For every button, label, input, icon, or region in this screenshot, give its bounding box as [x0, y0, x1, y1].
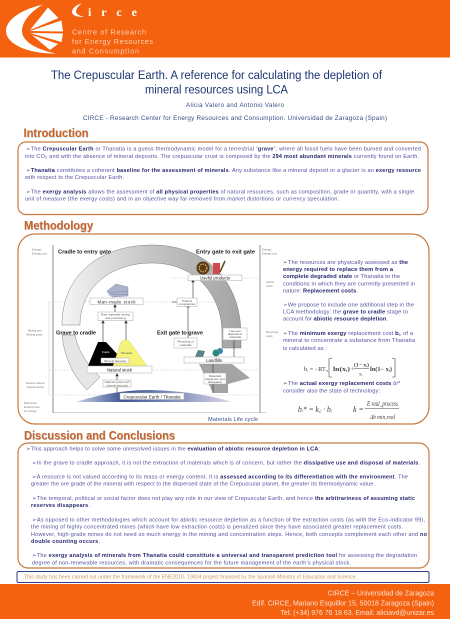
contact details: Tel: (+34) 976 76 18 63. Email: aliciavd@unizar.es — [280, 610, 435, 617]
text: grave to cradle paragraph: LCA methodology: the grave to cradle stage to — [283, 310, 408, 316]
box: raw materials formation: Natural cycles and — [105, 380, 130, 384]
box: man-made stock — [90, 298, 143, 304]
axis labels: Energy cost — [32, 252, 47, 256]
panel: introduction — [18, 142, 428, 214]
text: grave to cradle paragraph: account for abiotic resource depletion. — [283, 317, 388, 323]
funding note: This study has been carried out under the framework of the ENE2010- 19834 project financed by the Spanish Ministry of Education and Science. — [24, 575, 357, 581]
text: differentiation: ➢A resource is not valued according to its mass or energy content. It is assessed according to its differentiation with the environment. The — [32, 474, 408, 480]
affiliation: CIRCE - Research Center for Energy Resources and Consumption. Universidad de Zaragoza (Spain) — [83, 115, 387, 122]
equation: actual cost — [298, 400, 399, 421]
text: minimum exergy paragraph: mineral to concentrate a substance from Thanatia — [283, 338, 416, 344]
text: exergy analysis paragraph: ➢The exergy analysis allows the assessment of all physical properties of natural resources, such as composition, grade or quantity, with a single — [26, 190, 414, 196]
icon: CIRCE logo — [6, 4, 63, 54]
arrows: flows to man-made stock — [102, 280, 234, 393]
contact details — [252, 590, 435, 617]
text: arbitrariness — [31, 496, 415, 509]
box: product manufacture: manufacture — [179, 302, 196, 306]
text: differentiation: greater the ore grade of the mineral with respect to the dispersed state of the Crepuscular planet, the greater its thermodynamic value. — [31, 482, 375, 488]
box: disposal: disposal of — [228, 332, 242, 336]
logo wordmark: irce — [88, 5, 138, 19]
text: minimum exergy paragraph: is calculated as : — [283, 346, 327, 352]
box: recycling: Recycling of — [177, 340, 194, 344]
axis labels: Recycling — [266, 330, 279, 334]
text: other methodologies: the mining of highly concentrated mines (which have low extraction costs) is penalized since they have associated greater replacement costs. — [31, 525, 403, 531]
text: replacement costs paragraph: complete degraded state or Thanatia to the — [283, 274, 400, 280]
axis labels: Energy/ — [262, 248, 272, 252]
logo wordmark — [72, 4, 153, 56]
heading: Discussion and Conclusions: Discussion and Conclusions — [24, 431, 176, 443]
triangle: minerals — [113, 340, 147, 366]
text: dissipative use: ➢In the grave to cradle approach, it is not the extraction of materials which is of concern, but rather the dissipative use and disposal of materials. — [32, 460, 420, 466]
stage labels: Exit gate to grave — [157, 330, 203, 336]
crepuscular earth surface — [76, 390, 231, 402]
axis labels: costs — [266, 284, 273, 288]
box: raw materials: Raw materials mining — [101, 312, 130, 316]
axis labels: costs — [266, 334, 273, 338]
box: materials dispersion: Materials — [209, 374, 222, 378]
heading: Methodology: Methodology — [24, 221, 94, 233]
heading: Introduction: Introduction — [24, 128, 88, 140]
text: prediction tool: ➢The exergy analysis of minerals from Thanatia could constitute a universal and transparent prediction tool for assessing the degradation — [32, 553, 417, 559]
text: prediction tool: degree of non-renewable resources, with dramatic consequences for the future management of the earth’s physical stock. — [32, 560, 351, 566]
arc: cradle to exit gate band — [62, 245, 241, 348]
text: grave to cradle paragraph: ➢We propose to include one additional step in the — [283, 303, 414, 309]
box: raw materials formation — [103, 380, 131, 387]
axis labels: refining costs — [26, 332, 43, 336]
box: landfills: Landfills — [206, 358, 222, 363]
guide lines — [49, 278, 262, 395]
axis labels: Energy cost — [262, 252, 277, 256]
box: crepuscular earth / thanatia — [120, 393, 184, 400]
axis labels: Useful — [266, 280, 274, 284]
triangle: minerals: Minerals — [121, 351, 133, 355]
box: raw materials: and processing — [105, 316, 126, 320]
triangle: fuels: Fuels — [102, 350, 110, 354]
heading: Methodology: Methodology — [24, 220, 94, 232]
box: landfills — [184, 357, 244, 363]
equation: minimum exergy: xᵢ — [359, 372, 362, 378]
equation: minimum exergy — [304, 358, 395, 378]
text: differentiation — [31, 474, 408, 488]
equation: actual cost: Δb min,real — [369, 414, 395, 421]
box: man-made stock: Man-made stock — [98, 299, 136, 304]
text: minimum exergy paragraph: i — [399, 333, 400, 337]
text: replacement costs paragraph: nature: Replacement costs. — [283, 288, 358, 294]
axis labels: for energy — [24, 409, 37, 413]
text: prediction tool — [32, 553, 417, 566]
text: exergy analysis paragraph — [25, 190, 414, 203]
box: disposal — [223, 328, 247, 340]
box: useful products — [188, 275, 242, 281]
icon: landfill waste — [195, 348, 223, 357]
heading: Discussion and Conclusions: Discussion and Conclusions — [24, 430, 175, 442]
axis labels: Excess natural — [26, 381, 45, 385]
axis labels: mineral stocks — [26, 385, 44, 389]
text: thanatia paragraph: with respect to the Crepuscular Earth. — [24, 175, 124, 181]
text: minimum exergy paragraph: ➢The minimum exergy replacement cost b — [283, 331, 399, 337]
axis labels: Mining and — [28, 328, 42, 332]
text: minimum exergy paragraph: , of a — [400, 331, 414, 337]
box: recycling: materials — [179, 343, 192, 347]
text: exergy analysis paragraph: unit of measure (the exergy costs) and in an objective way far removed from market distortions or currency speculation. — [25, 197, 339, 203]
axes — [53, 245, 266, 413]
stage labels: Grave to cradle — [56, 330, 96, 336]
box: product manufacture — [177, 298, 197, 306]
stage labels: Cradle to entry gate — [58, 250, 111, 256]
box: recycling — [174, 338, 197, 348]
text: intro sentence: ➢This approach helps to solve some unresolved issues in the evaluation of abiotic resource depletion in LCA: — [26, 446, 320, 452]
box: mineral deposits: Mineral deposits — [104, 359, 126, 363]
box: product manufacture: Product — [182, 299, 192, 303]
box: disposal: Use and — [229, 329, 241, 333]
equation: minimum exergy: ln(xᵢ) — [333, 366, 350, 373]
axis labels: Reference — [24, 401, 37, 405]
box: materials dispersion — [204, 373, 226, 384]
axis labels: Energy/ — [32, 248, 42, 252]
logo wordmark: Centre of Research — [72, 28, 146, 36]
text: other methodologies: ➢As opposed to other methodologies which account for abiotic resource depletion as a function of the extraction costs (as with the Eco-indicator 99), — [32, 518, 425, 524]
title: mineral resources using LCA — [145, 82, 289, 96]
text: other methodologies — [31, 518, 428, 545]
text: minimum exergy paragraph — [283, 331, 416, 352]
equation: actual cost: E real_process — [366, 400, 398, 408]
box: natural stock: Natural stock — [107, 368, 133, 373]
text: actual exergy paragraph: ➢The actual exergy replacement costs bi* — [283, 381, 401, 387]
icon: man-made stack — [107, 284, 128, 297]
header band — [0, 0, 450, 58]
box: crepuscular earth / thanatia: Crepuscular Earth / Thanatia — [124, 394, 181, 399]
chart: materials life cycle diagram — [24, 245, 279, 423]
heading: Introduction: Introduction — [24, 128, 89, 140]
box: materials dispersion: dissipation — [208, 380, 222, 384]
footer band — [0, 584, 450, 619]
text: arbitrariness: ➢The temporal, political or social factor does not play any role in our view of Crepuscular Earth, and hence the arbitrariness of assuming static — [32, 496, 415, 502]
authors: Alicia Valero and Antonio Valero — [186, 102, 285, 109]
text: crepuscular earth paragraph: ➢The Crepuscular Earth or Thanatia is a guess thermodynamic model for a terrestrial “grave”, where all fossil fuels have been burned and converted — [26, 147, 421, 153]
axis labels — [24, 248, 279, 413]
text: actual exergy paragraph — [283, 381, 401, 395]
logo wordmark: and Consumption — [72, 46, 139, 56]
title — [51, 68, 383, 96]
stage labels: Entry gate to exit gate — [196, 250, 255, 256]
axis label: materials life cycle: Materials Life cycle — [208, 417, 258, 423]
box: materials dispersion: dispersion and — [205, 377, 225, 381]
text: crepuscular earth paragraph: into CO₂ and with the absence of mineral deposits. The crepuscular crust is composed by the 294 most abundant minerals currently found on Earth. — [25, 154, 419, 160]
equation: minimum exergy: bᵢ = −RT₀ — [304, 367, 328, 373]
funding note — [17, 572, 429, 582]
contact details: Edif. CIRCE, Mariano Esquillor 15, 50018 Zaragoza (Spain) — [252, 600, 434, 608]
text: other methodologies: However, high-grade mines do not need so much energy in the mining and concentration steps. Hence, both concepts complement each other and no — [31, 532, 428, 538]
box: natural stock — [87, 366, 152, 373]
text: thanatia paragraph: ➢Thanatia constitutes a coherent baseline for the assessment of minerals. Any substance like a mineral deposit or a glacier is an exergy resource — [26, 168, 421, 174]
axis labels: Environment — [24, 405, 40, 409]
text: replacement costs paragraph — [283, 260, 415, 294]
text: replacement costs paragraph: conditions in which they are currently presented in — [283, 282, 415, 288]
stage labels — [56, 250, 255, 336]
triangle: fuels — [88, 342, 121, 366]
text: actual exergy paragraph: consider also the state of technology: — [283, 389, 380, 395]
arc: grave to cradle band — [62, 335, 100, 390]
equation: actual cost: k = — [353, 405, 364, 414]
text: crepuscular earth paragraph — [25, 147, 421, 160]
text: arbitrariness: reserves disappears. — [31, 503, 90, 509]
arrow shape: disposal to nature — [199, 364, 250, 393]
text: other methodologies: double counting occurs. — [31, 539, 100, 545]
text: grave to cradle paragraph — [283, 303, 414, 323]
equation: minimum exergy: (1− xᵢ) — [354, 362, 369, 368]
contact details: CIRCE – Universidad de Zaragoza — [328, 590, 434, 598]
text: replacement costs paragraph: energy required to replace them from a — [283, 267, 394, 273]
box: raw materials formation: mineral deposits — [106, 383, 128, 387]
equation: minimum exergy: + — [350, 367, 354, 373]
equation: minimum exergy: ln(1− xᵢ) — [370, 366, 392, 373]
panel: discussion and conclusions — [18, 443, 429, 568]
text: replacement costs paragraph: ➢The resources are physically assessed as the — [283, 260, 408, 266]
panel: methodology — [18, 234, 429, 424]
icon: useful products — [196, 261, 225, 274]
equation: actual cost: bᵢ* = k꜀ · bᵢ — [298, 405, 332, 414]
box: useful products: Useful products — [200, 276, 230, 281]
box: disposal: materials — [229, 335, 242, 339]
text: thanatia paragraph — [24, 168, 421, 181]
logo wordmark: for Energy Resources — [72, 37, 153, 46]
box: raw materials — [98, 312, 133, 320]
box: mineral deposits — [101, 358, 129, 363]
title: The Crepuscular Earth. A reference for calculating the depletion of — [51, 68, 383, 82]
